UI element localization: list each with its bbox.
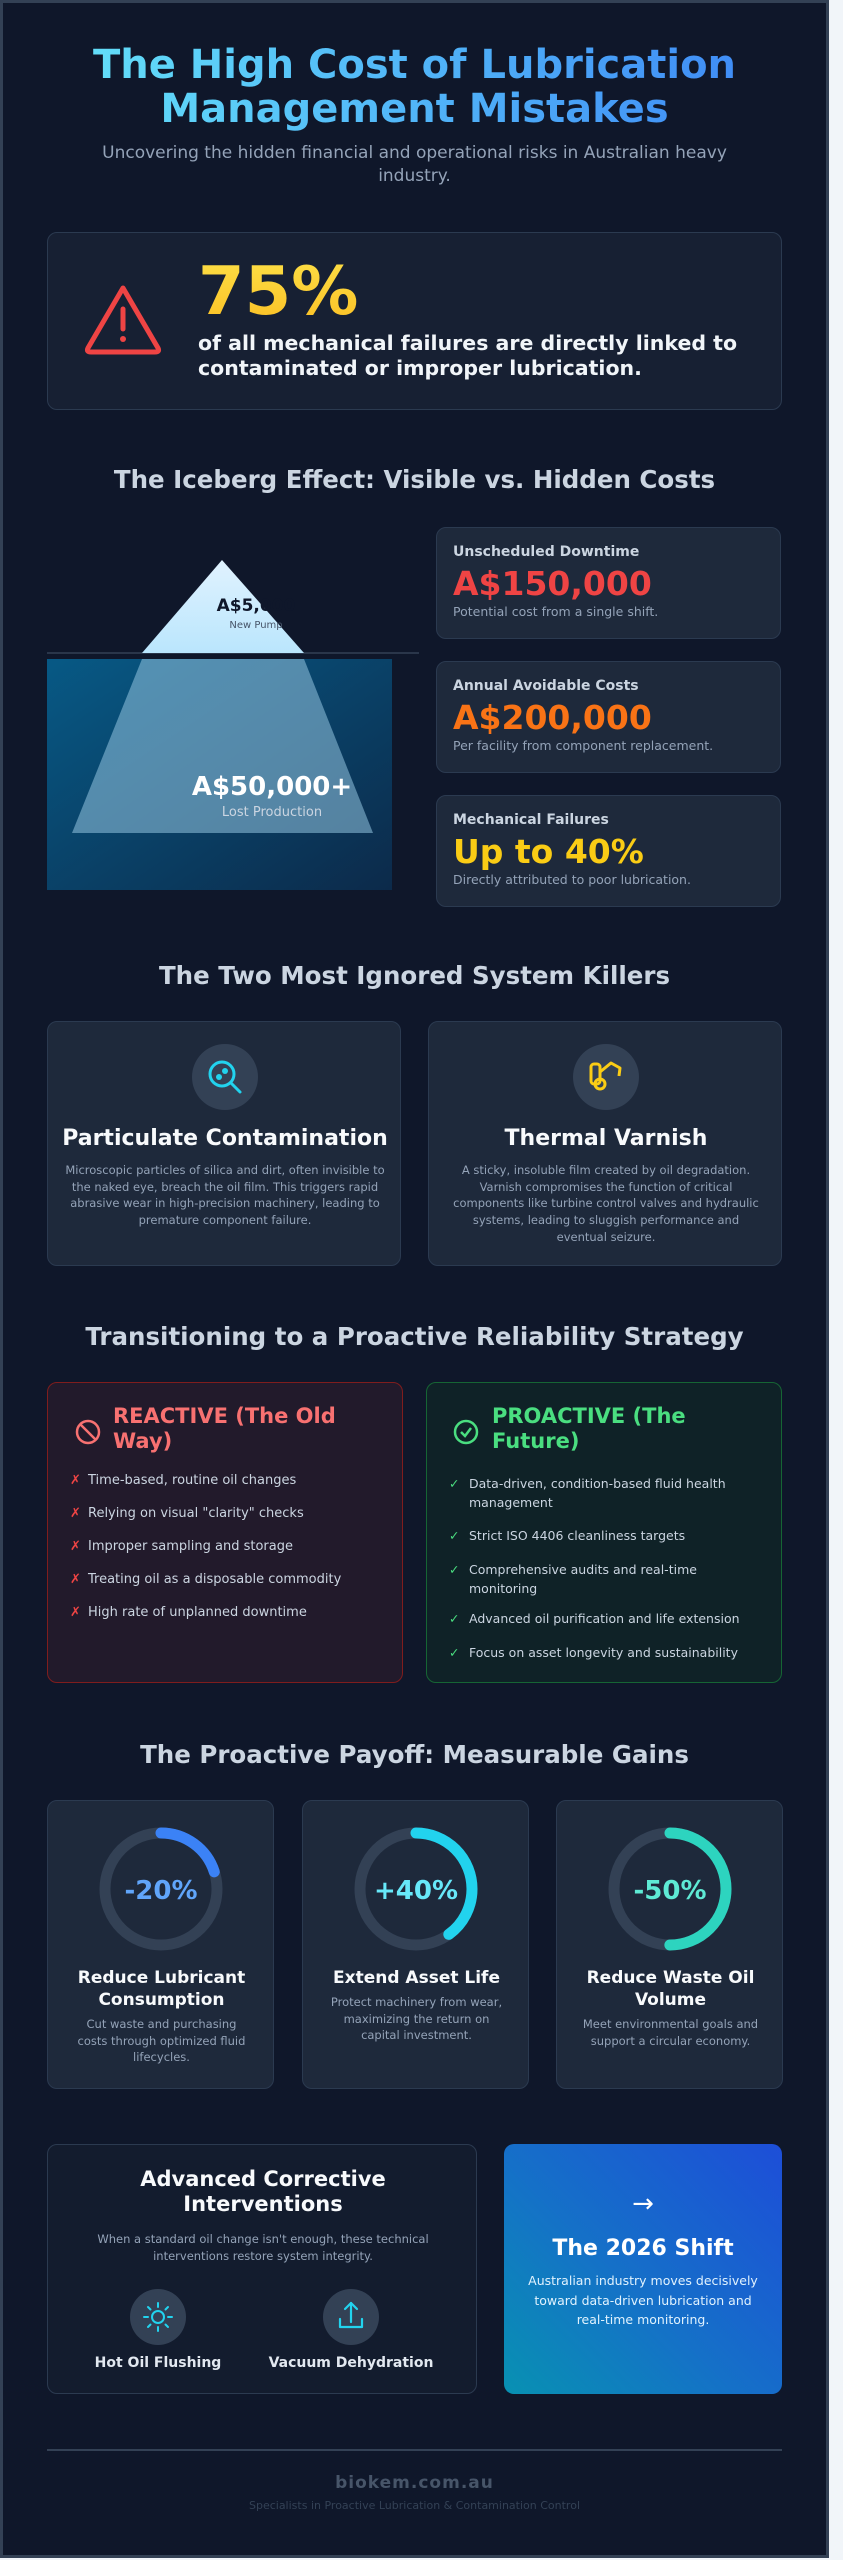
panel: reactive — [47, 1382, 403, 1683]
panel: varnish: Thermal Varnish — [505, 1126, 707, 1151]
panel: reactive: ✗ — [70, 1539, 81, 1554]
footer: Specialists in Proactive Lubrication & Contamination Control — [249, 2499, 580, 2512]
card: mechanical failures: Mechanical Failures — [453, 812, 609, 828]
panel: proactive: Strict ISO 4406 cleanliness targets — [469, 1528, 685, 1543]
panel: interventions: Vacuum Dehydration — [269, 2355, 433, 2371]
icon: varnish — [573, 1044, 639, 1110]
card: avoidable costs: A$200,000 — [453, 698, 652, 737]
card: avoidable costs — [436, 661, 781, 773]
card: downtime: Potential cost from a single shift. — [453, 604, 658, 619]
panel: reactive: High rate of unplanned downtime — [88, 1605, 307, 1620]
panel: 75% stat — [47, 232, 782, 410]
card: asset life — [302, 1800, 529, 2089]
chart: iceberg: Lost Production — [222, 805, 322, 820]
panel: particulate: Particulate Contamination — [62, 1126, 388, 1151]
card: waste oil: Reduce Waste Oil Volume — [587, 1968, 754, 2010]
panel: particulate: Microscopic particles of silica and dirt, often invisible to the naked eye, breach the oil film. This triggers rapid abrasive wear in high-precision machinery, leading to premature component failure. — [65, 1163, 385, 1227]
icon: arrow: → — [632, 2189, 654, 2219]
card: mechanical failures: Directly attributed to poor lubrication. — [453, 872, 691, 887]
chart: iceberg: A$5,000 — [217, 596, 296, 616]
title: The High Cost of Lubrication — [93, 42, 736, 88]
big number: 75% — [198, 252, 358, 330]
icon: magnifier — [192, 1044, 258, 1110]
panel: interventions: Interventions — [183, 2192, 343, 2216]
card: downtime: A$150,000 — [453, 564, 652, 603]
card: lubricant: Reduce Lubricant Consumption — [78, 1968, 245, 2010]
panel: proactive: Focus on asset longevity and sustainability — [469, 1645, 738, 1660]
panel: 2026 shift: Australian industry moves decisively toward data-driven lubrication and real-time monitoring. — [528, 2273, 758, 2327]
gauge: -50%: -50% — [633, 1876, 707, 1906]
panel: proactive: ✓ — [449, 1562, 459, 1577]
card: avoidable costs: Annual Avoidable Costs — [453, 678, 639, 694]
panel: 2026 shift — [504, 2144, 782, 2394]
icon: sun — [130, 2289, 186, 2345]
gauge: +40%: +40% — [374, 1876, 458, 1906]
card: asset life: Protect machinery from wear, maximizing the return on capital investment. — [331, 1995, 502, 2042]
icon: upload — [323, 2289, 379, 2345]
panel: reactive: Time-based, routine oil changes — [88, 1473, 296, 1488]
card: lubricant: Cut waste and purchasing costs through optimized fluid lifecycles. — [78, 2017, 245, 2064]
panel: proactive: ✓ — [449, 1476, 459, 1491]
card: avoidable costs: Per facility from component replacement. — [453, 738, 713, 753]
panel: varnish: A sticky, insoluble film created by oil degradation. Varnish compromises the function of critical components like turbine control valves and hydraulic systems, leading to sluggish performance and eventual seizure. — [453, 1163, 759, 1244]
heading: payoff: The Proactive Payoff: Measurable Gains — [140, 1740, 689, 1769]
card: waste oil: Meet environmental goals and support a circular economy. — [583, 2017, 758, 2048]
footer: biokem.com.au — [335, 2473, 494, 2493]
card: mechanical failures — [436, 795, 781, 907]
panel: varnish — [428, 1021, 782, 1266]
gauge: +40% — [354, 1828, 478, 1950]
panel: reactive: Relying on visual "clarity" checks — [88, 1506, 304, 1521]
title — [3, 43, 826, 131]
gauge: -20% — [100, 1828, 222, 1950]
heading: iceberg: The Iceberg Effect: Visible vs. Hidden Costs — [114, 465, 715, 494]
title: Management Mistakes — [160, 86, 669, 132]
panel: proactive: Data-driven, condition-based fluid health management — [469, 1476, 726, 1510]
icon: prohibited — [76, 1420, 100, 1444]
footer — [249, 2473, 580, 2512]
panel: proactive — [426, 1382, 782, 1683]
icon: check circle — [454, 1420, 478, 1444]
chart: iceberg: A$50,000+ — [192, 772, 352, 802]
card: downtime: Unscheduled Downtime — [453, 544, 639, 560]
panel: reactive: ✗ — [70, 1506, 81, 1521]
panel: reactive: ✗ — [70, 1605, 81, 1620]
icon: warning — [84, 286, 162, 354]
chart: iceberg: New Pump — [229, 620, 283, 631]
card: asset life: Extend Asset Life — [333, 1968, 500, 1988]
chart: iceberg — [47, 560, 419, 890]
card: mechanical failures: Up to 40% — [453, 832, 644, 871]
panel: 2026 shift: The 2026 Shift — [552, 2236, 734, 2261]
subtitle: Uncovering the hidden financial and operational risks in Australian heavy industry. — [102, 143, 727, 186]
heading: transitioning: Transitioning to a Proactive Reliability Strategy — [85, 1322, 744, 1351]
panel: reactive: REACTIVE (The Old Way) — [113, 1404, 336, 1453]
panel: proactive: ✓ — [449, 1611, 459, 1626]
panel: proactive: PROACTIVE (The Future) — [492, 1404, 686, 1453]
panel: reactive: ✗ — [70, 1473, 81, 1488]
panel: proactive: Advanced oil purification and life extension — [469, 1611, 740, 1626]
panel: proactive: ✓ — [449, 1645, 459, 1660]
gauge: -50% — [608, 1828, 732, 1950]
stat text: of all mechanical failures are directly linked to contaminated or improper lubrication. — [198, 331, 737, 380]
panel: reactive: Treating oil as a disposable commodity — [88, 1572, 341, 1587]
panel: interventions: Advanced Corrective — [140, 2167, 386, 2191]
heading: system killers: The Two Most Ignored System Killers — [159, 961, 670, 990]
panel: interventions: Hot Oil Flushing — [95, 2355, 221, 2371]
panel: proactive: ✓ — [449, 1528, 459, 1543]
panel: reactive: ✗ — [70, 1572, 81, 1587]
panel: particulate — [47, 1021, 401, 1266]
panel: interventions: When a standard oil change isn't enough, these technical interventions restore system integrity. — [97, 2232, 429, 2263]
panel: proactive: Comprehensive audits and real-time monitoring — [469, 1562, 697, 1596]
panel: reactive: Improper sampling and storage — [88, 1539, 293, 1554]
panel: interventions — [47, 2144, 477, 2394]
card: waste oil — [556, 1800, 783, 2089]
card: lubricant — [47, 1800, 274, 2089]
gauge: -20%: -20% — [124, 1876, 198, 1906]
card: downtime — [436, 527, 781, 639]
